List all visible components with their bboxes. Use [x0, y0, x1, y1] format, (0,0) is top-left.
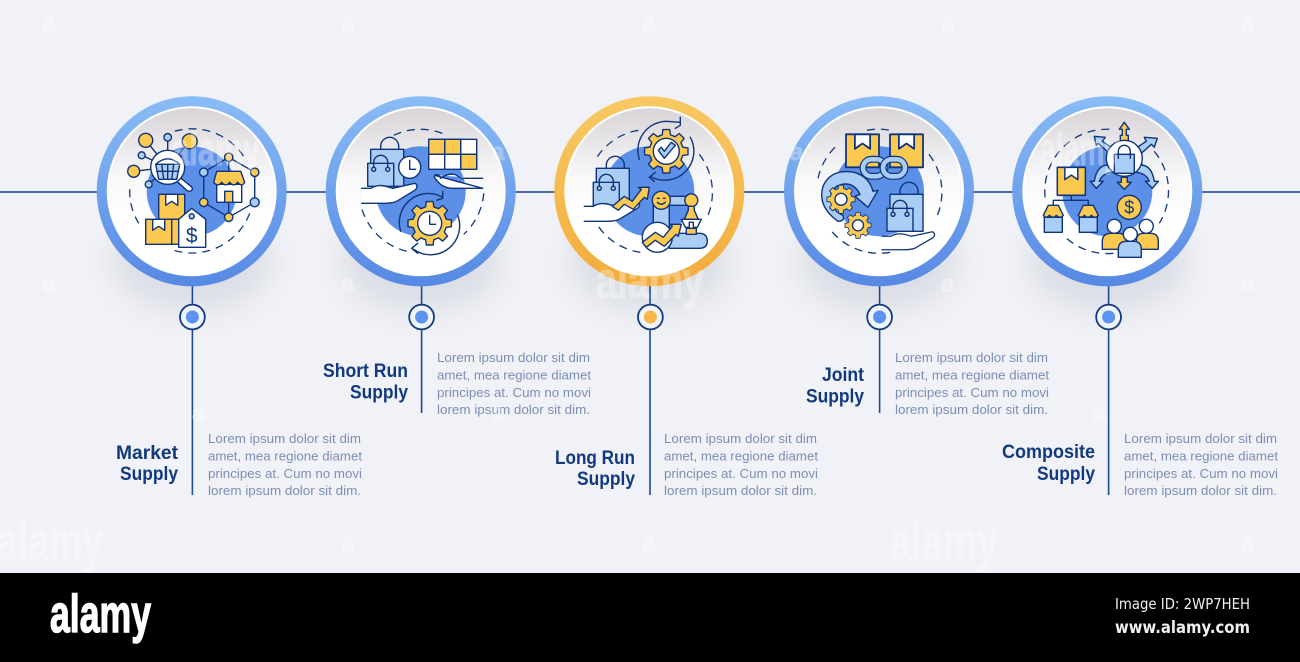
title: short run supply: Supply	[350, 382, 408, 404]
title: long run supply: Supply	[577, 469, 635, 490]
text: joint description: amet, mea regione diamet	[895, 368, 1049, 382]
panel: long run supply	[554, 96, 744, 495]
icon: joint supply	[818, 129, 942, 253]
panel: composite supply	[1012, 96, 1202, 495]
icon: short run supply	[362, 129, 484, 255]
text: joint description: lorem ipsum dolor sit dim.	[895, 402, 1048, 417]
watermarks: a	[790, 139, 804, 166]
title: long run supply: Long Run	[555, 448, 635, 469]
connector: long run	[649, 280, 651, 495]
watermarks: a	[1241, 10, 1255, 37]
footer image id: Image ID: 2WP7HEH	[1115, 595, 1250, 613]
text: composite description: lorem ipsum dolor sit dim.	[1124, 483, 1277, 498]
icon: market network: $	[186, 224, 198, 247]
watermarks: alamy	[0, 509, 103, 572]
watermarks: a	[1241, 271, 1255, 298]
watermarks: a	[492, 400, 506, 427]
watermarks: a	[341, 530, 355, 557]
text: long run description	[664, 431, 818, 498]
title: long run supply	[555, 448, 635, 490]
text: short run description	[437, 350, 591, 417]
chain links	[863, 159, 905, 176]
footer website: www.alamy.com	[1115, 618, 1250, 637]
node: short run	[409, 305, 434, 329]
shadow: joint	[799, 212, 959, 312]
text: long run description: lorem ipsum dolor sit dim.	[664, 483, 817, 498]
watermarks: alamy	[1040, 123, 1120, 175]
watermarks: a	[642, 10, 656, 37]
title: composite supply: Supply	[1037, 464, 1095, 485]
title: short run supply: Short Run	[323, 361, 408, 382]
horizontal timeline	[0, 191, 1300, 193]
text: long run description: amet, mea regione diamet	[664, 449, 818, 464]
panel: joint supply	[784, 96, 974, 413]
watermarks: a	[42, 10, 56, 37]
title: composite supply: Composite	[1002, 442, 1095, 463]
text: long run description: Lorem ipsum dolor sit dim	[664, 431, 817, 446]
watermarks: a	[642, 530, 656, 557]
title: market supply: Supply	[120, 464, 178, 485]
text: joint description: Lorem ipsum dolor sit dim	[895, 350, 1048, 365]
ring: market	[97, 96, 287, 286]
node: composite	[1096, 305, 1121, 329]
title: market supply: Market	[116, 443, 179, 464]
text: short run description: principes at. Cum no movi	[437, 385, 591, 400]
panel: short run supply	[326, 96, 516, 413]
text: composite description: amet, mea regione diamet	[1124, 449, 1278, 464]
ring: long run	[554, 96, 744, 286]
watermarks: a	[192, 400, 206, 427]
title: market supply	[116, 443, 179, 485]
icon: long run supply	[584, 117, 712, 252]
text: short run description: Lorem ipsum dolor sit dim	[437, 350, 590, 365]
connector: market	[192, 280, 193, 495]
text: short run description: amet, mea regione diamet	[437, 368, 591, 382]
shadow: short run	[341, 212, 501, 312]
text: long run description: principes at. Cum no movi	[664, 466, 818, 481]
text: composite description	[1124, 431, 1278, 498]
text: joint description: principes at. Cum no movi	[895, 385, 1049, 400]
text: market supply description: amet, mea regione diamet	[208, 449, 362, 464]
watermarks: a	[341, 271, 355, 298]
title: joint supply	[806, 365, 865, 408]
watermarks: a	[42, 271, 56, 298]
text: composite description: Lorem ipsum dolor sit dim	[1124, 431, 1277, 446]
shadow: long run	[570, 212, 730, 312]
text: short run description: lorem ipsum dolor sit dim.	[437, 402, 590, 417]
footer bar	[0, 573, 1300, 662]
shadow: composite	[1028, 212, 1188, 312]
title: joint supply: Joint	[822, 365, 865, 386]
text: market supply description: Lorem ipsum dolor sit dim	[208, 431, 361, 446]
panel: market supply	[97, 96, 287, 495]
title: short run supply	[323, 361, 408, 404]
watermarks: a	[1241, 530, 1255, 557]
connector: short run	[421, 280, 422, 413]
text: market supply description	[208, 431, 362, 498]
watermarks: a	[491, 139, 505, 166]
ring: joint	[784, 96, 974, 286]
title: composite supply	[1002, 442, 1095, 485]
text: composite description: principes at. Cum no movi	[1124, 466, 1278, 481]
title: joint supply: Supply	[806, 386, 864, 408]
watermarks: a	[1092, 400, 1106, 427]
ring: composite	[1012, 96, 1202, 286]
node: market	[180, 305, 205, 329]
text: market supply description: principes at. Cum no movi	[208, 466, 362, 481]
footer logo: alamy	[50, 585, 151, 644]
shadow: market	[112, 212, 272, 312]
watermarks: a	[341, 10, 355, 37]
icon: composite supply: $	[1124, 197, 1134, 217]
node: long run	[638, 305, 663, 329]
watermarks: alamy	[596, 252, 704, 310]
watermarks: a	[941, 271, 955, 298]
connector: composite	[1108, 280, 1109, 495]
text: joint description	[895, 350, 1049, 417]
watermarks: alamy	[172, 123, 260, 175]
icon: market network	[128, 129, 259, 253]
text: market supply description: lorem ipsum dolor sit dim.	[208, 483, 361, 498]
icon: composite supply	[1043, 122, 1169, 257]
watermarks: alamy	[890, 509, 998, 572]
connector: joint	[879, 280, 880, 413]
watermarks: a	[941, 10, 955, 37]
node: joint	[867, 305, 892, 329]
ring: short run	[326, 96, 516, 286]
